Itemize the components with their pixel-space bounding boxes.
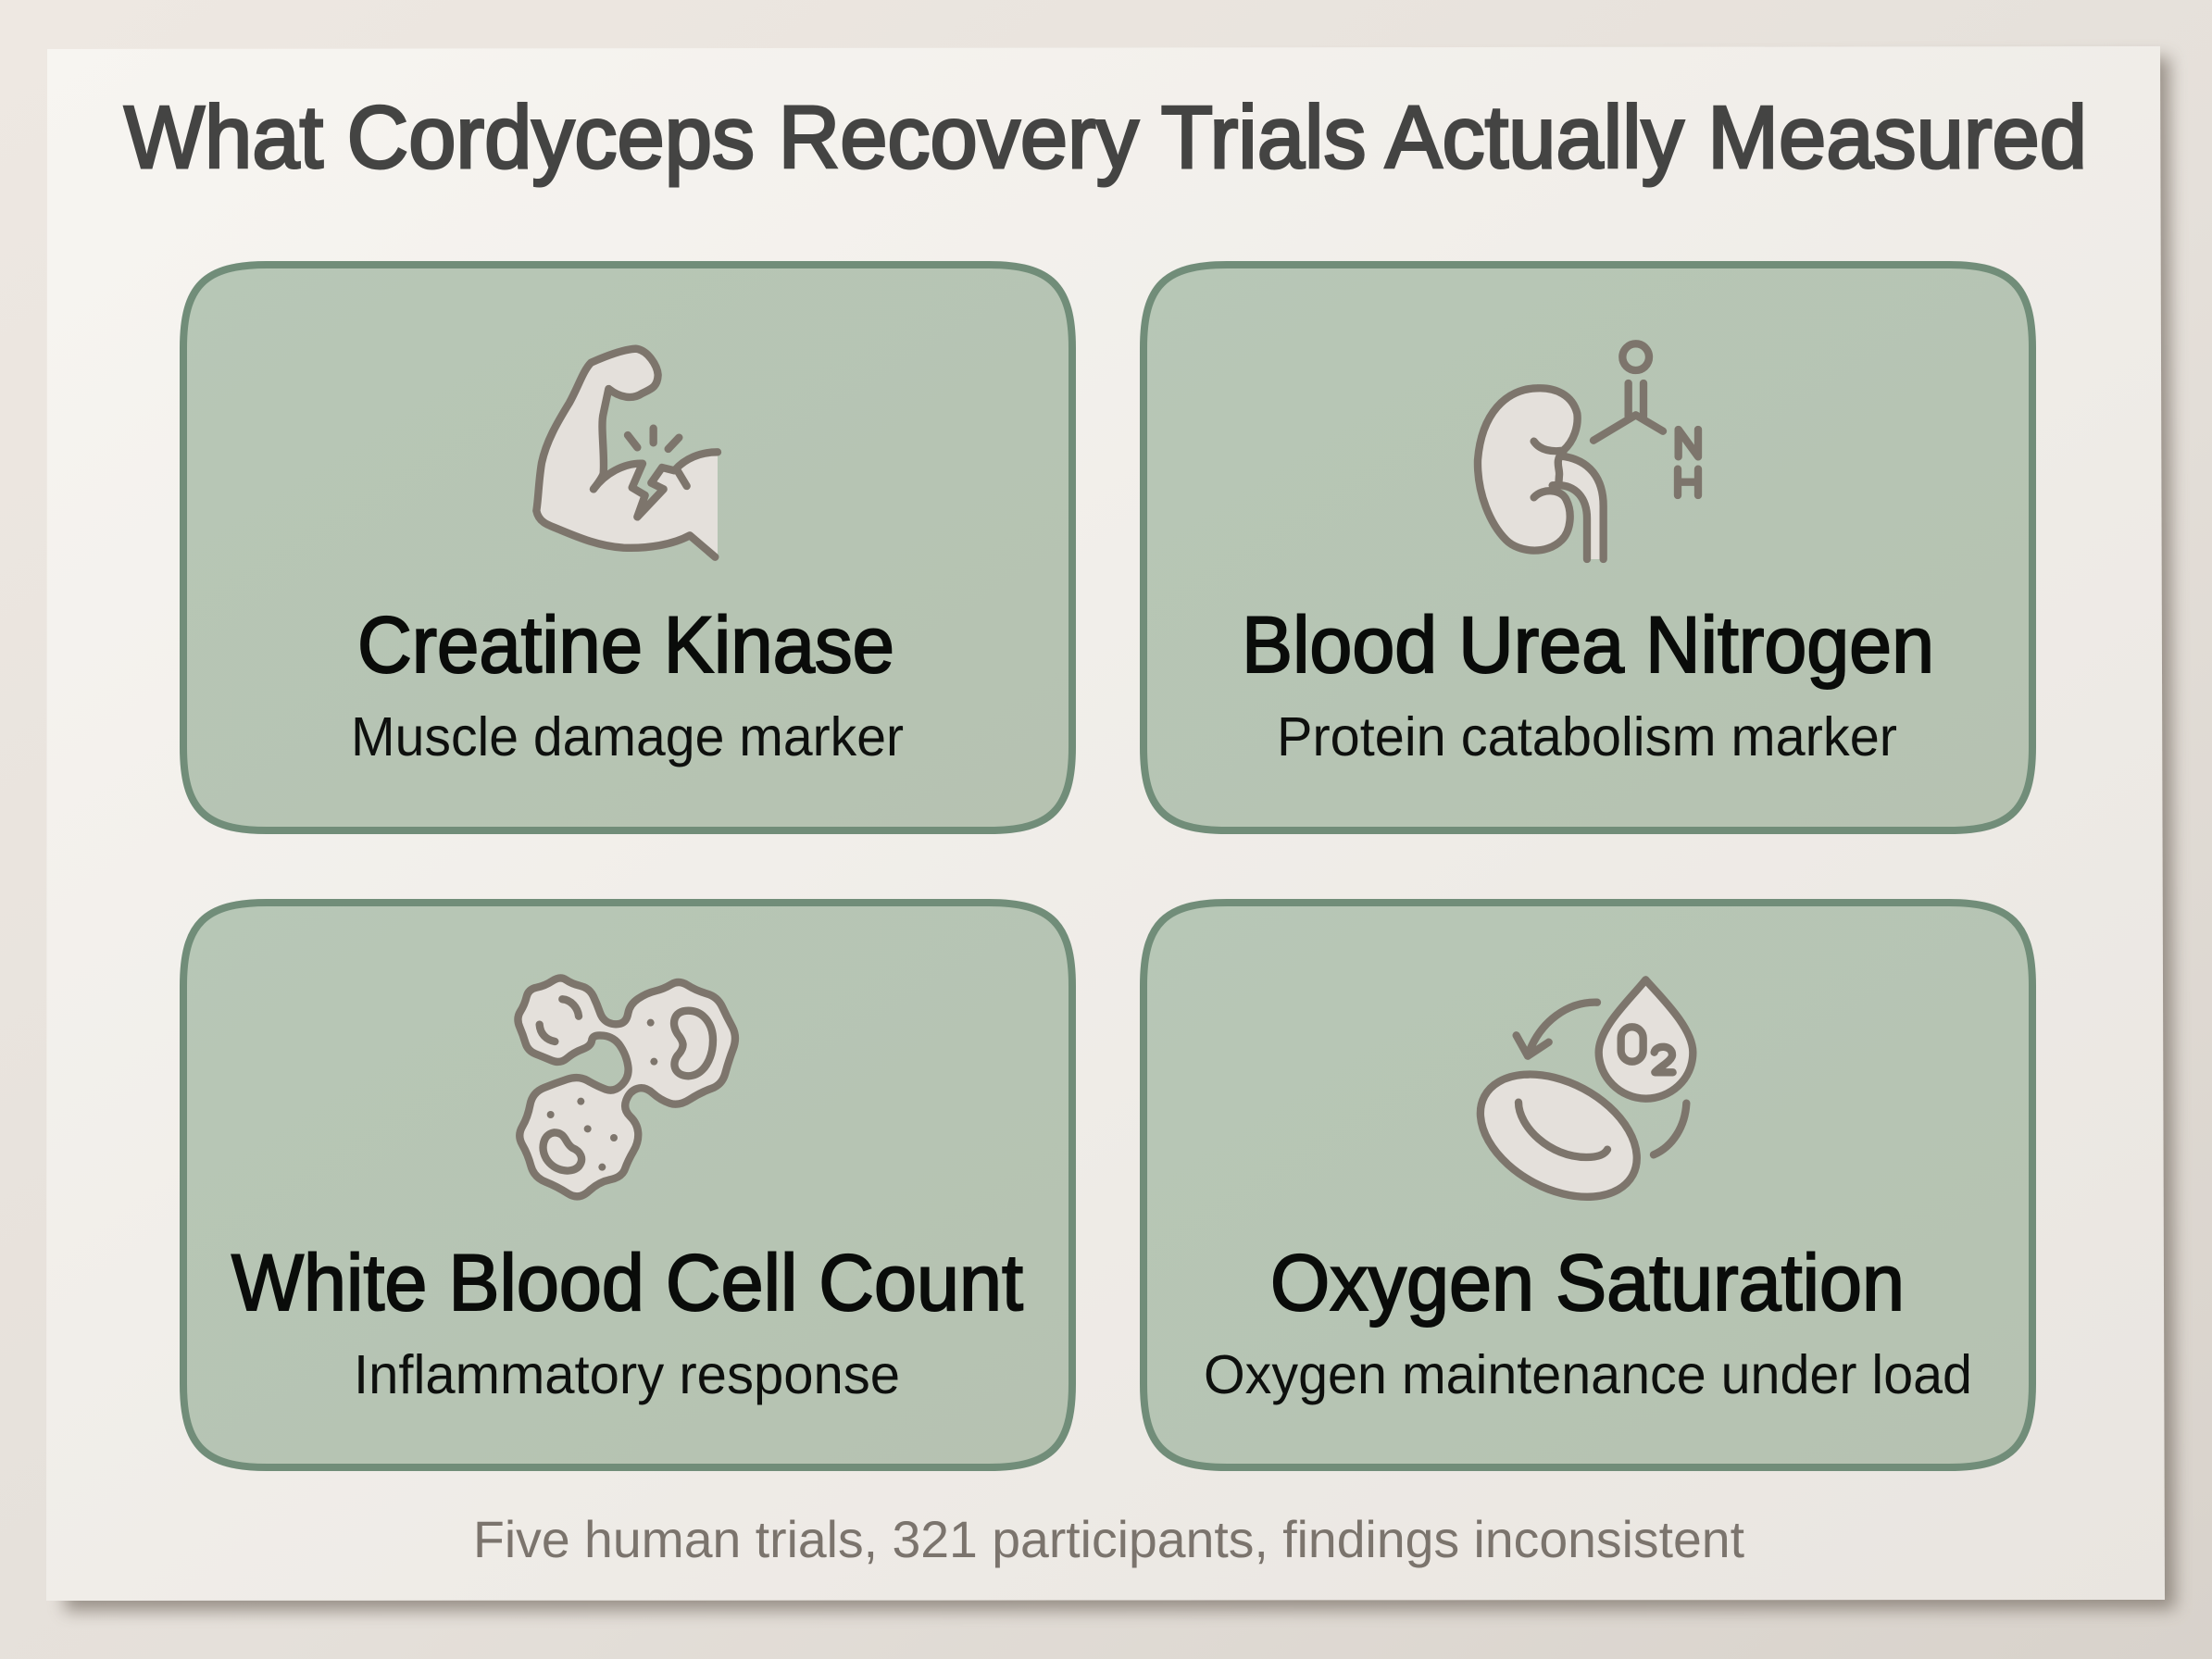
- panel: oxygen saturation: [1143, 903, 2032, 1467]
- description: Oxygen maintenance under load: [1204, 1344, 1972, 1405]
- heading: Creatine Kinase: [357, 601, 894, 690]
- panel: blood urea nitrogen: [1143, 265, 2032, 830]
- icon: red blood cell and oxygen drop: [1459, 979, 1693, 1222]
- description: Protein catabolism marker: [1277, 706, 1897, 767]
- heading: Blood Urea Nitrogen: [1242, 601, 1934, 690]
- icon: flexed muscle with damage: [536, 349, 718, 557]
- heading: White Blood Cell Count: [231, 1239, 1023, 1328]
- footer note: Five human trials, 321 participants, findings inconsistent: [473, 1510, 1744, 1568]
- card background: [183, 903, 1072, 1467]
- heading: Oxygen Saturation: [1270, 1239, 1905, 1328]
- title: What Cordyceps Recovery Trials Actually Measured: [124, 88, 2087, 187]
- description: Inflammatory response: [354, 1344, 900, 1405]
- icon: white blood cells: [518, 978, 735, 1196]
- panel: creatine kinase: [183, 265, 1072, 830]
- card background: [183, 265, 1072, 830]
- description: Muscle damage marker: [351, 706, 904, 767]
- icon: kidney and urea molecule: [1478, 343, 1698, 559]
- panel: white blood cell count: [183, 903, 1072, 1467]
- card background: [1143, 265, 2032, 830]
- card background: [1143, 903, 2032, 1467]
